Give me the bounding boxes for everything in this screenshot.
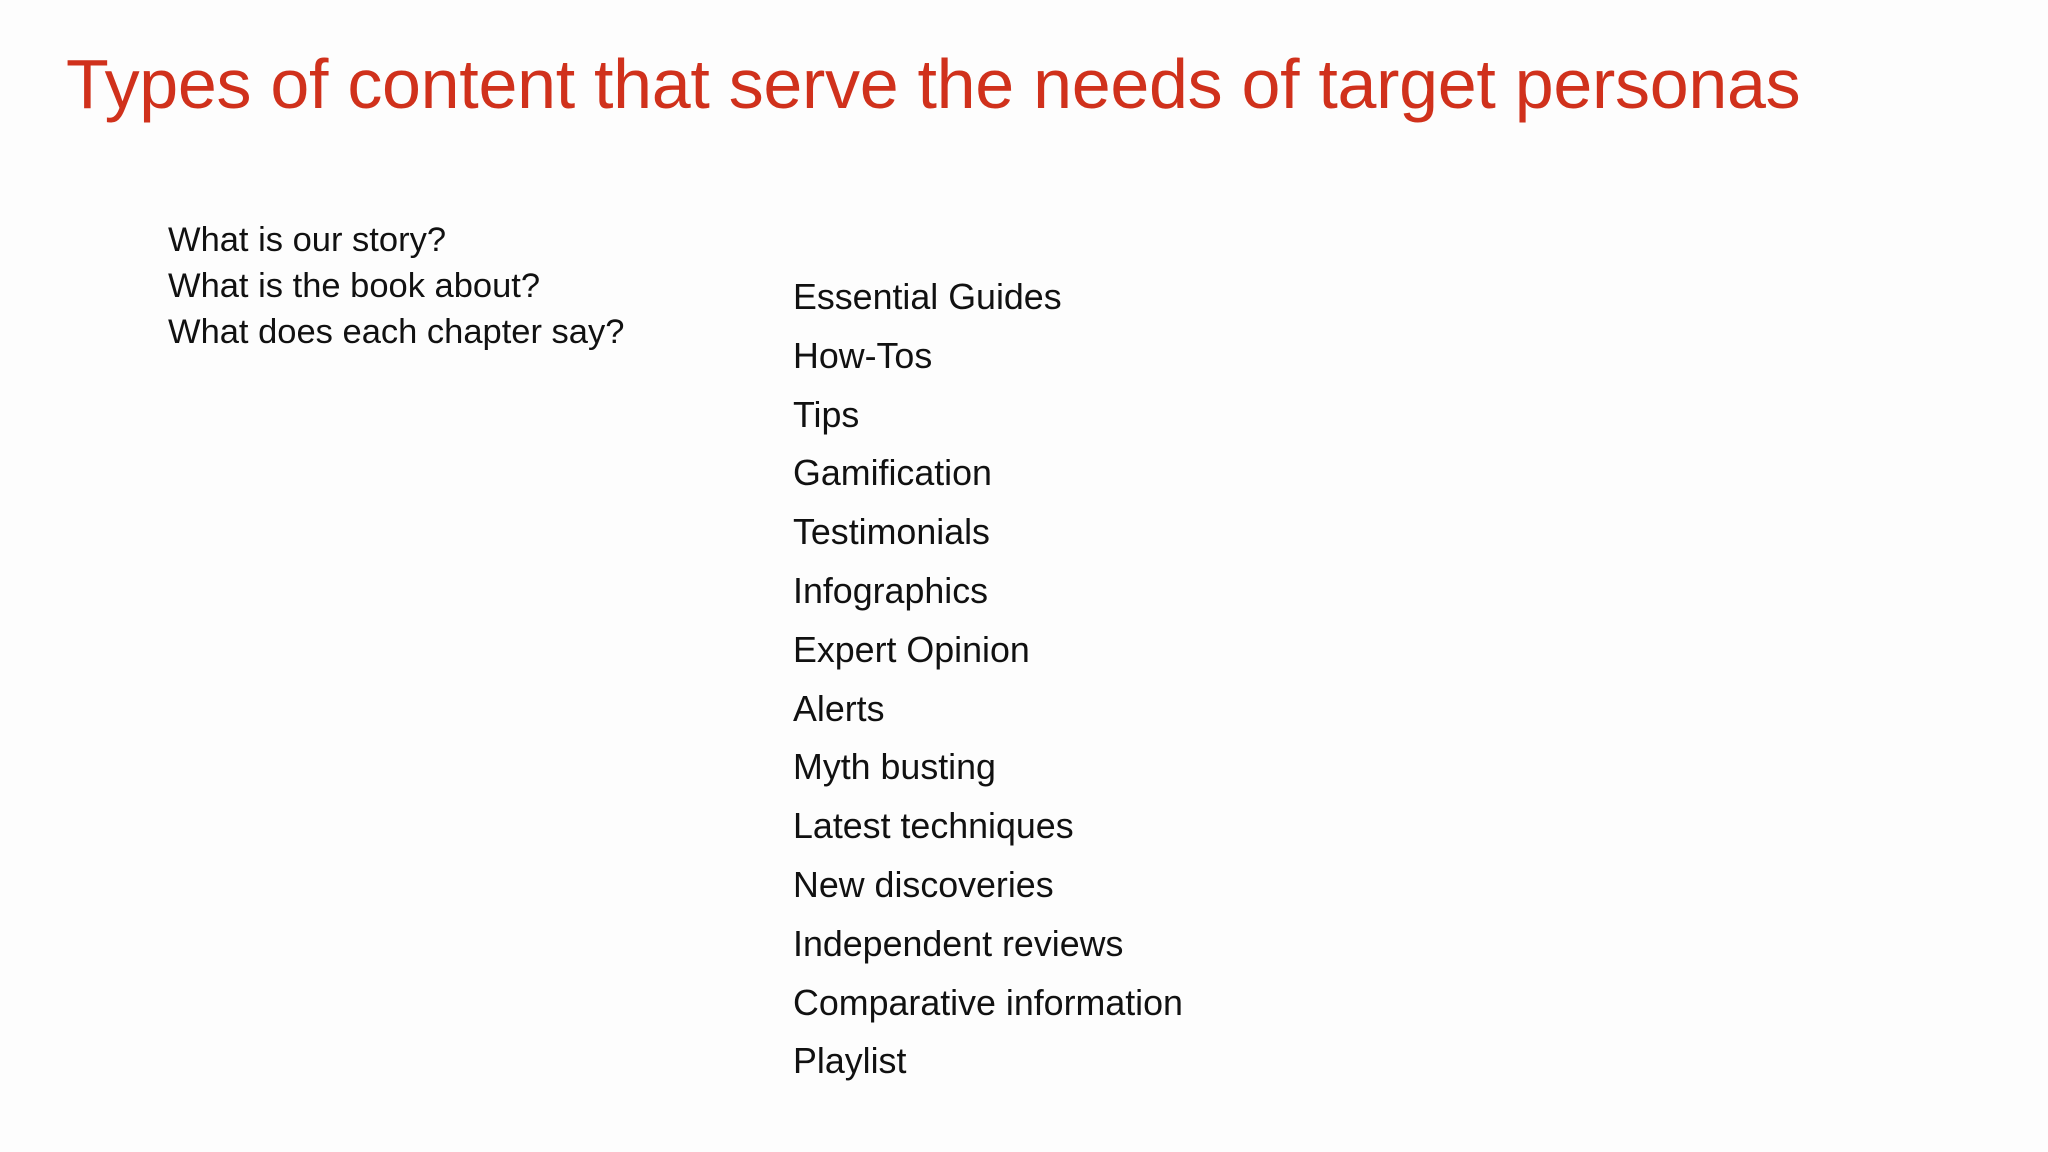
list: content types: Independent reviews xyxy=(793,924,1123,964)
text block: questions: What is our story? xyxy=(168,221,446,259)
list: content types: Playlist xyxy=(793,1041,906,1081)
list: content types: How-Tos xyxy=(793,336,932,376)
list: content types: Testimonials xyxy=(793,512,990,552)
list: content types: Essential Guides xyxy=(793,277,1062,317)
text block: questions: What is the book about? xyxy=(168,267,540,305)
list: content types: New discoveries xyxy=(793,865,1054,905)
list: content types: Comparative information xyxy=(793,983,1183,1023)
list: content types: Gamification xyxy=(793,453,992,493)
list: content types: Latest techniques xyxy=(793,806,1074,846)
list: content types: Tips xyxy=(793,395,859,435)
text block: questions: What does each chapter say? xyxy=(168,313,624,351)
list: content types: Alerts xyxy=(793,689,885,729)
list: content types xyxy=(793,277,1183,1081)
list: content types: Expert Opinion xyxy=(793,630,1030,670)
text block: questions xyxy=(168,221,624,351)
list: content types: Myth busting xyxy=(793,747,996,787)
title: Types of content that serve the needs of target personas xyxy=(66,45,1800,123)
list: content types: Infographics xyxy=(793,571,988,611)
